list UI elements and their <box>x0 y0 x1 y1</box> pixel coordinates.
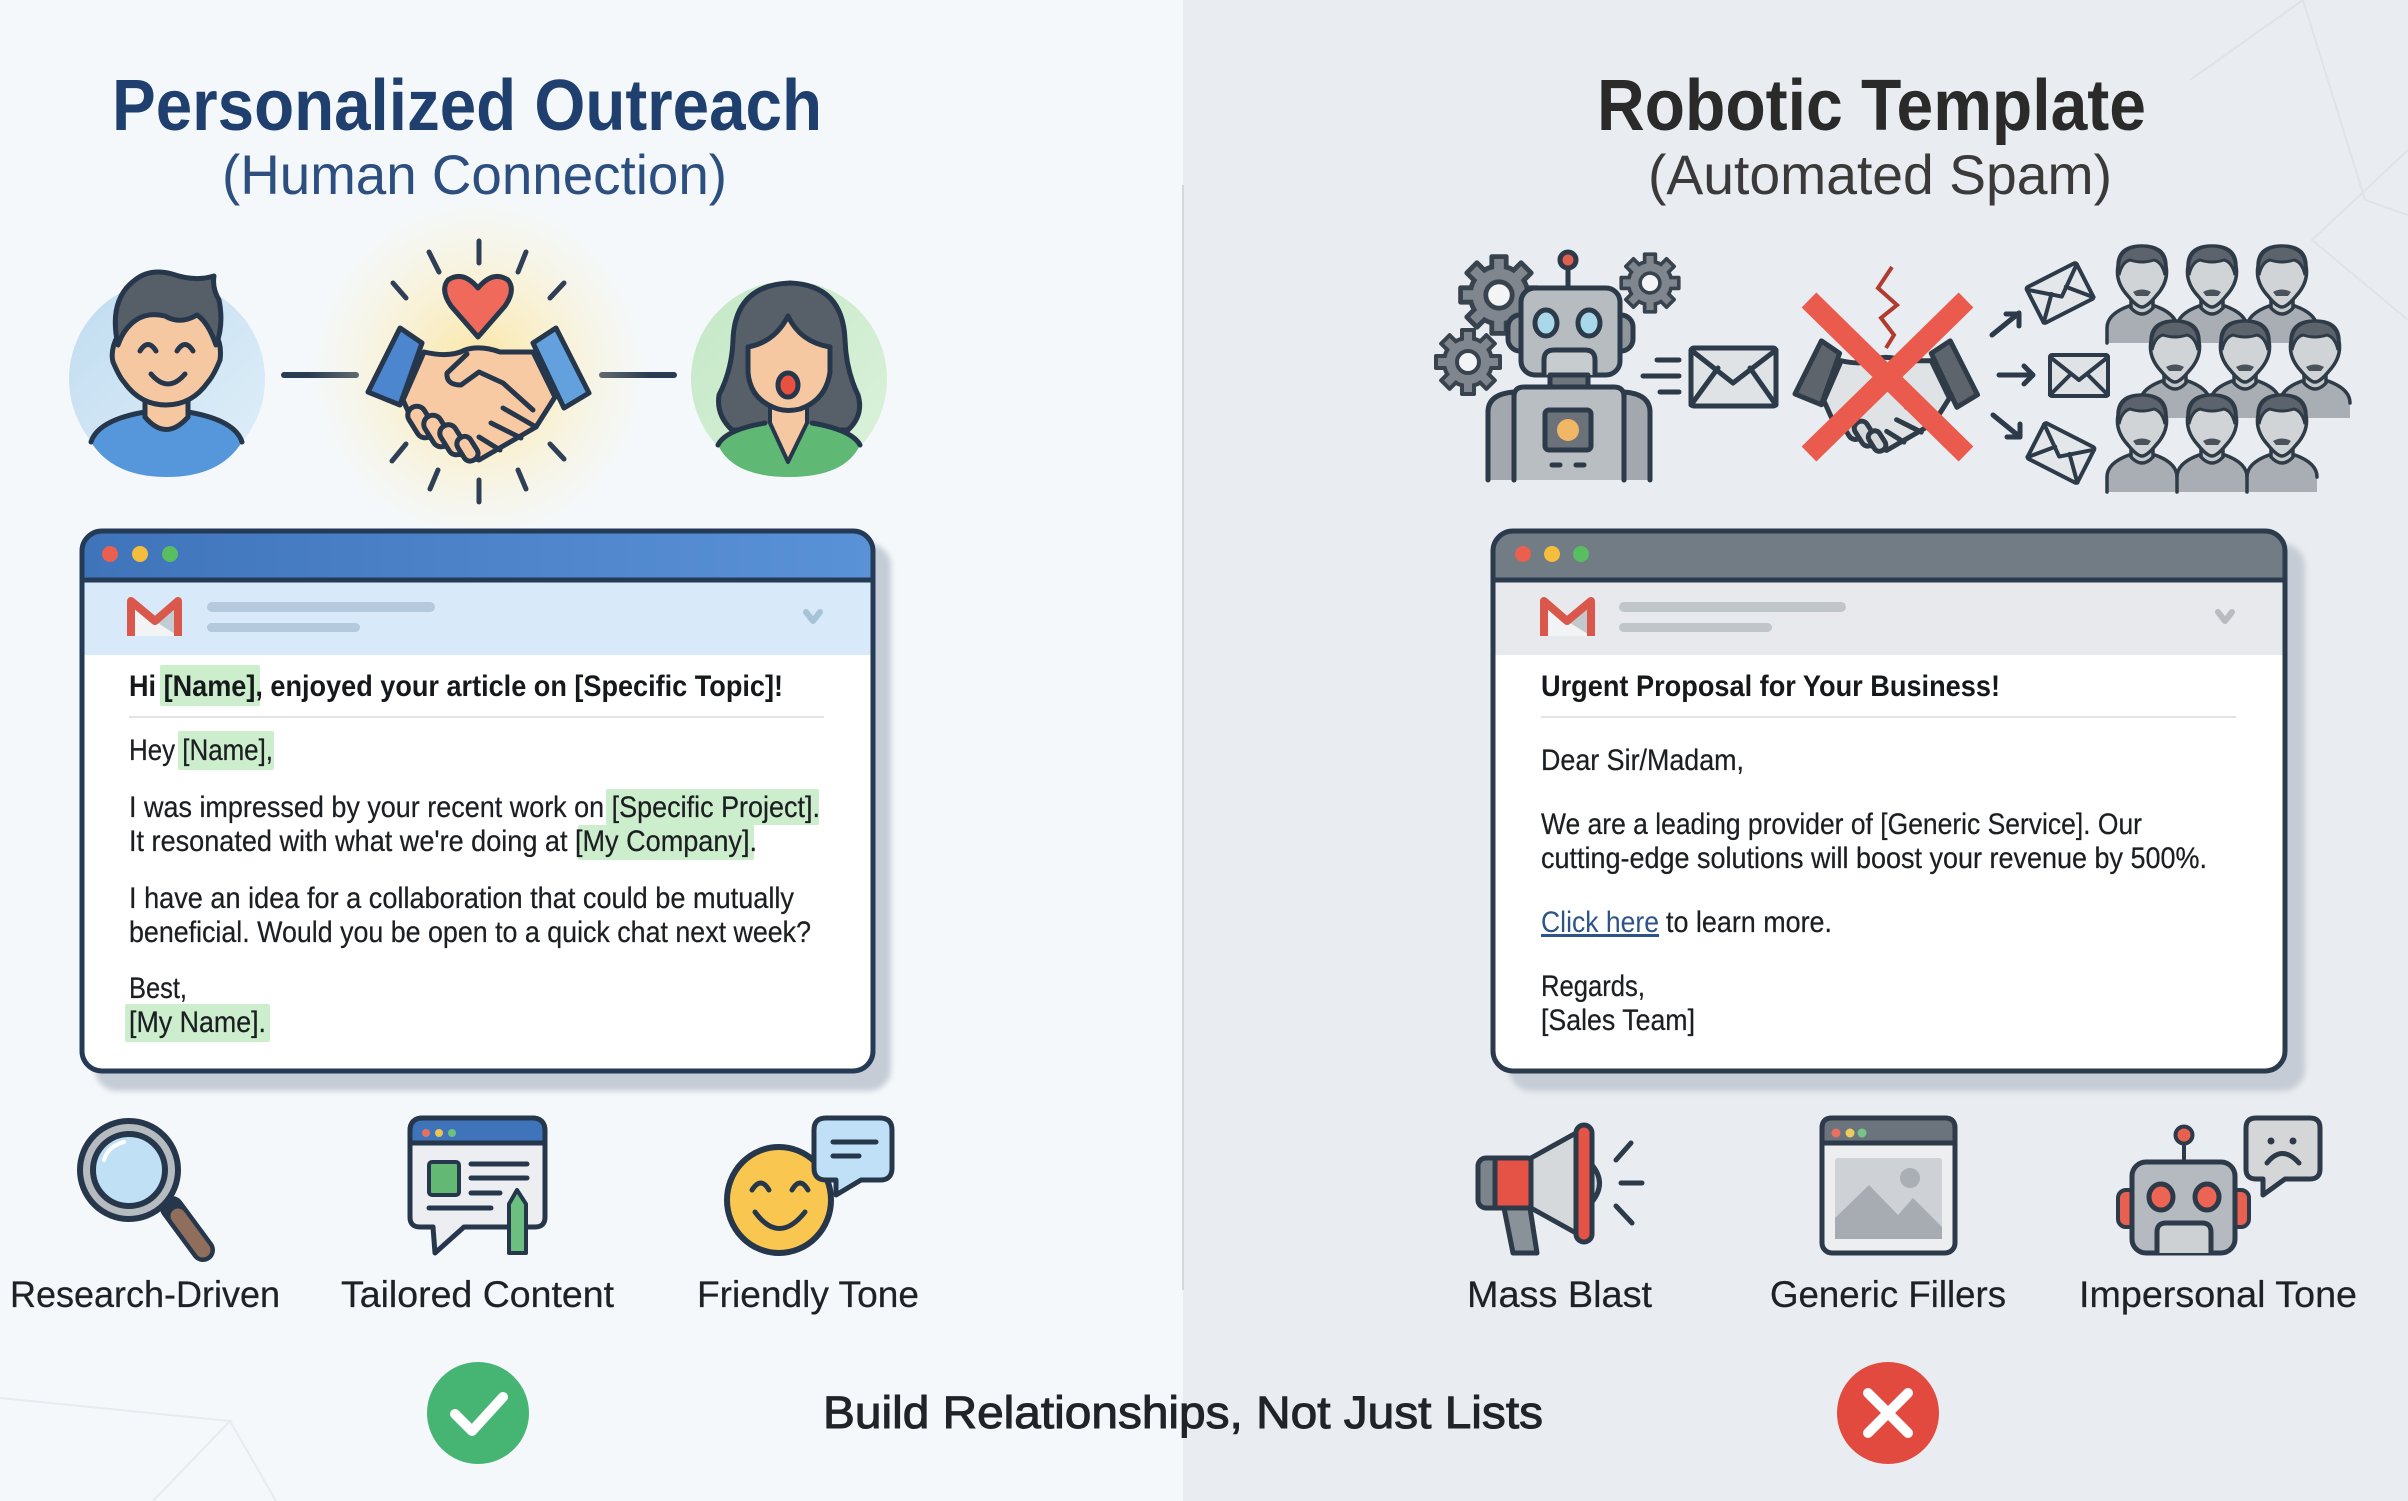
email body <box>129 734 820 1039</box>
arrows <box>1992 313 2033 437</box>
title bar <box>1493 531 2285 580</box>
title: Personalized Outreach <box>112 66 822 206</box>
email window: personalized <box>82 531 891 1091</box>
label: Generic Fillers: Generic Fillers <box>1770 1274 2006 1315</box>
title: Personalized Outreach: (Human Connection) <box>222 143 727 206</box>
tagline: Build Relationships, Not Just Lists <box>823 1387 1543 1438</box>
icon: red cross badge <box>1837 1362 1939 1464</box>
icon: crack <box>1878 267 1897 348</box>
email body: It resonated with what we're doing at [My Company]. <box>129 825 757 858</box>
highlights <box>125 665 819 1042</box>
email body: [Sales Team] <box>1541 1004 1695 1037</box>
title: Personalized Outreach: Personalized Outreach <box>112 66 822 146</box>
connector line left <box>284 372 356 378</box>
connector line right <box>602 372 674 378</box>
panel background: personalized outreach <box>0 0 1183 1501</box>
label: Research-Driven: Research-Driven <box>10 1274 280 1315</box>
icon: friendly smiley with speech bubble <box>727 1118 892 1253</box>
icon: megaphone <box>1478 1125 1642 1253</box>
panel background: robotic template <box>1183 0 2408 1501</box>
subject: Urgent Proposal for Your Business! <box>1541 670 2000 703</box>
rays <box>392 241 564 502</box>
email body: to learn more. <box>1666 906 1832 939</box>
icon: tailored content <box>410 1118 545 1253</box>
title: Robotic Template: Robotic Template <box>1597 66 2146 146</box>
avatar: smiling man <box>69 272 265 477</box>
label: Friendly Tone: Friendly Tone <box>697 1274 919 1315</box>
email body: cutting-edge solutions will boost your revenue by 500%. <box>1541 842 2207 875</box>
email body: beneficial. Would you be open to a quick chat next week? <box>129 916 811 949</box>
icon: heart <box>445 276 511 337</box>
icon: magnifying glass <box>80 1121 203 1250</box>
email body: Dear Sir/Madam, <box>1541 744 1744 777</box>
icon: red X <box>1809 300 1966 454</box>
icon: robot <box>1488 252 1650 480</box>
email body: I have an idea for a collaboration that could be mutually <box>129 882 794 915</box>
icon: envelope <box>1691 348 1776 406</box>
title: Robotic Template: (Automated Spam) <box>1648 143 2112 206</box>
title: Robotic Template <box>1597 66 2146 206</box>
email body: Regards, <box>1541 970 1645 1003</box>
illustration: human connection <box>69 195 887 545</box>
email window: template <box>1493 531 2305 1091</box>
icon: green check badge <box>427 1362 529 1464</box>
title bar <box>82 531 873 580</box>
glow <box>309 195 649 545</box>
email header <box>82 581 873 655</box>
crowd of recipients <box>2107 246 2350 492</box>
email body: Click here <box>1541 906 1659 939</box>
icon: handshake <box>368 328 589 464</box>
label: Impersonal Tone: Impersonal Tone <box>2079 1274 2357 1315</box>
icon: greyed handshake <box>1795 341 1978 453</box>
icon: gears <box>1436 254 1679 394</box>
email header <box>1493 581 2285 655</box>
icon: generic image placeholder <box>1822 1118 1955 1253</box>
subject: Hi [Name], enjoyed your article on [Specific Topic]! <box>129 670 783 703</box>
email body: I was impressed by your recent work on [Specific Project]. <box>129 791 820 824</box>
envelopes <box>2026 262 2108 484</box>
speed lines <box>1643 360 1679 392</box>
email body: Hey [Name], <box>129 734 273 767</box>
email body <box>1541 744 2207 1037</box>
icon: sad robot <box>2118 1118 2320 1253</box>
email body: [My Name]. <box>129 1006 266 1039</box>
label: Tailored Content: Tailored Content <box>341 1274 615 1315</box>
label: Mass Blast: Mass Blast <box>1467 1274 1653 1315</box>
email body: Best, <box>129 972 187 1005</box>
illustration: automated spam <box>1436 246 2350 492</box>
avatar: woman <box>691 281 887 477</box>
email body: We are a leading provider of [Generic Service]. Our <box>1541 808 2142 841</box>
